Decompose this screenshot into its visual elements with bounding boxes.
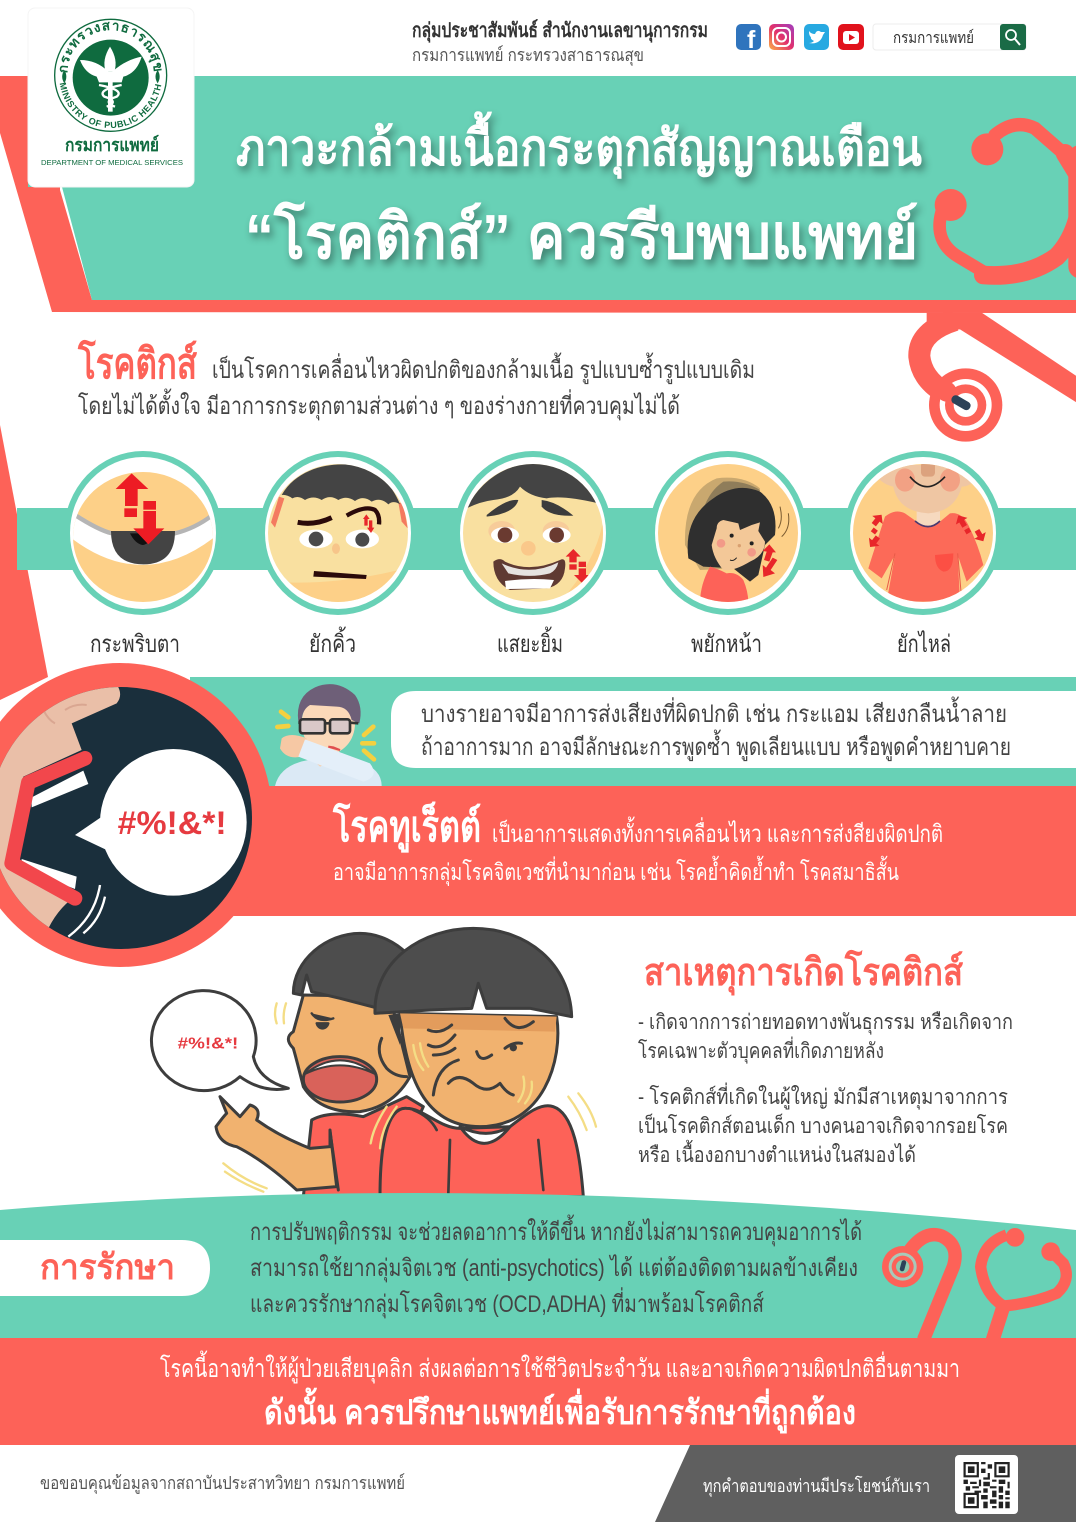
symptom labels: แสยะยิ้ม [497,626,563,658]
symptom labels: กระพริบตา [90,631,180,658]
icon: facebook: f [747,26,756,54]
icon: QR code [955,1455,1018,1514]
panel: logo card [28,8,194,188]
text: causes of tics: หรือ เนื้องอกบางตำแหน่งในสมองได้ [638,1140,916,1167]
panel: logo card: กระทรวงสาธารณสุข [60,22,162,72]
panel: footer grey [655,1445,1076,1522]
text: definition of tics: โดยไม่ได้ตั้งใจ มีอาการกระตุกตามส่วนต่าง ๆ ของร่างกายที่ควบคุมไม่ได้ [78,388,680,421]
panel: logo card: DEPARTMENT OF MEDICAL SERVICES [41,158,183,167]
text: causes of tics [638,949,1013,1167]
back boy [288,933,423,1197]
title: “โรคติกส์” ควรรีบพบแพทย์ [245,200,918,272]
panel: treatment: การปรับพฤติกรรม จะช่วยลดอาการให้ดีขึ้น หากยังไม่สามารถควบคุมอาการได้ [250,1214,862,1247]
text: definition of tics [77,339,755,421]
symptom band [17,508,1076,570]
panel: header banner [0,76,1076,313]
text: definition of tics: เป็นโรคการเคลื่อนไหวผิดปกติของกล้ามเนื้อ รูปแบบซ้ำรูปแบบเดิม [212,352,755,385]
text: causes of tics: สาเหตุการเกิดโรคติกส์ [644,949,964,996]
text: definition of tics: โรคติกส์ [77,339,197,387]
panel: logo card: MINISTRY OF PUBLIC HEALTH [60,82,162,128]
text: causes of tics: โรคเฉพาะตัวบุคคลที่เกิดภายหลัง [638,1036,884,1064]
panel: blink icon [64,451,222,615]
icon: facebook [736,24,761,54]
symptom labels: พยักหน้า [691,631,762,658]
panel: footer grey: ทุกคำตอบของท่านมีประโยชน์กับเรา [703,1475,930,1497]
icon: instagram [769,24,794,50]
panel: logo card: กรมการแพทย์ [65,134,159,155]
text: organisation name: กลุ่มประชาสัมพันธ์ สำนักงานเลขานุการกรม [412,19,708,43]
panel: tourette band: โรคทูเร็ตต์ [332,801,481,853]
title [236,111,922,272]
panel: treatment: สามารถใช้ยากลุ่มจิตเวช (anti-psychotics) ได้ แต่ต้องติดตามผลข้างเคียง [250,1254,858,1283]
illustration: two boys with tics [151,928,596,1197]
search box: กรมการแพทย์ [893,28,974,47]
panel: mouth speech circle: #%!&*! [118,805,227,841]
icon: coughing person [275,684,382,786]
panel: nodding icon [649,451,807,615]
panel: grimace icon [454,451,612,615]
panel: tourette band [200,786,1076,916]
panel: mouth speech circle [0,663,272,967]
panel: shrug icon [844,451,1002,615]
pointing arm [216,1097,338,1192]
title: ภาวะกล้ามเนื้อกระตุกสัญญาณเตือน [236,111,922,179]
panel: tourette band: อาจมีอาการกลุ่มโรคจิตเวชที่นำมาก่อน เช่น โรคย้ำคิดย้ำทำ โรคสมาธิสั้น [333,856,899,886]
panel: tourette band: เป็นอาการแสดงทั้งการเคลื่อนไหว และการส่งสียงผิดปกติ [492,816,943,848]
icon: twitter [804,24,829,50]
panel: warning band: ดังนั้น ควรปรึกษาแพทย์เพื่อรับการรักษาที่ถูกต้อง [264,1387,856,1434]
text: organisation name [412,19,708,66]
text: causes of tics: - โรคติกส์ที่เกิดในผู้ใหญ่ มักมีสาเหตุมาจากการ [638,1082,1008,1110]
text: organisation name: กรมการแพทย์ กระทรวงสาธารณสุข [412,45,644,66]
search box [873,24,1026,50]
icon: youtube [838,24,864,50]
text: causes of tics: - เกิดจากการถ่ายทอดทางพันธุกรรม หรือเกิดจาก [638,1011,1013,1035]
panel: vocal symptoms band [190,677,1076,787]
panel: treatment [0,1193,1076,1340]
symptom labels [90,626,951,658]
front boy [275,928,596,1197]
text: footer credit: ขอขอบคุณข้อมูลจากสถาบันประสาทวิทยา กรมการแพทย์ [40,1473,405,1494]
panel: warning band [0,1338,1076,1445]
panel: treatment: การรักษา [40,1248,175,1287]
speech bubble [151,991,288,1091]
speech bubble: #%!&*! [178,1035,238,1052]
symptom labels: ยักคิ้ว [309,626,356,658]
symptom labels: ยักไหล่ [897,630,951,658]
left coral wedge [0,425,48,700]
panel: eyebrow icon [259,451,417,615]
icon: stethoscope header and bell [919,125,1076,442]
text: causes of tics: เป็นโรคติกส์ตอนเด็ก บางคนอาจเกิดจากรอยโรค [638,1112,1008,1138]
icon: stethoscope treatment [882,1228,1066,1340]
panel: treatment: และควรรักษากลุ่มโรคจิตเวช (OCD,ADHA) ที่มาพร้อมโรคติกส์ [250,1287,764,1319]
